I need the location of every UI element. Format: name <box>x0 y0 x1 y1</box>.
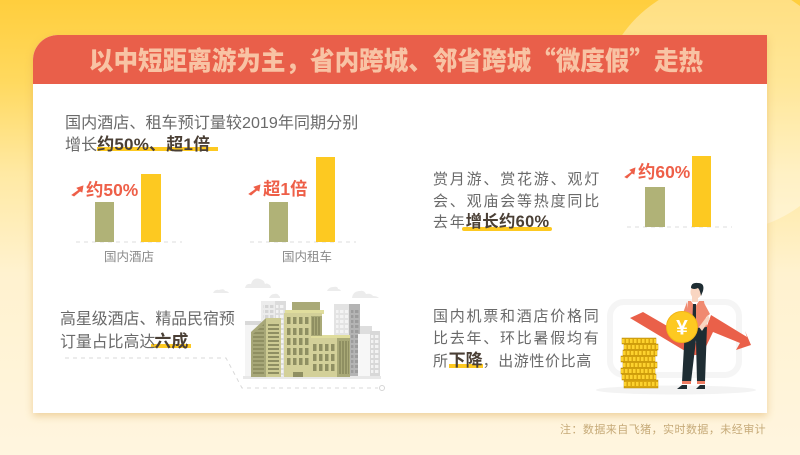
chart caption: hotels: 国内酒店 <box>104 250 154 264</box>
text block: prices: 比去年、环比暑假均有 <box>433 330 601 347</box>
bar chart: themed tours <box>624 156 732 228</box>
highlight: premium share <box>151 344 191 348</box>
text block: bookings: 国内酒店、租车预订量较2019年同期分别 <box>65 114 358 132</box>
chart label: themed tours growth: 约60% <box>638 162 690 182</box>
text block: bookings <box>65 114 358 154</box>
illustration: man with coin and falling arrow <box>596 282 756 394</box>
chart caption: car rental: 国内租车 <box>282 250 332 264</box>
text block: themed tours: 赏月游、赏花游、观灯 <box>433 171 601 188</box>
text block: themed tours: 会、观庙会等热度同比 <box>433 192 601 210</box>
bar chart: hotels <box>71 174 182 242</box>
text block: themed tours <box>433 171 601 231</box>
chart label: car rental growth: 超1倍 <box>263 179 307 199</box>
illustration: man with coin and falling arrow: ¥ <box>676 316 688 340</box>
title: 以中短距离游为主，省内跨城、邻省跨城“微度假”走热 <box>89 41 703 78</box>
bar chart: car rental <box>248 157 356 242</box>
text block: premium share: 订量占比高达六成 <box>60 332 188 350</box>
title banner <box>33 35 767 84</box>
text block: bookings: 增长约50%、超1倍 <box>65 135 210 154</box>
chart label: hotels growth: 约50% <box>86 180 138 200</box>
text block: premium share: 高星级酒店、精品民宿预 <box>60 311 235 328</box>
footnote: 注：数据来自飞猪，实时数据，未经审计 <box>560 424 766 436</box>
text block: prices <box>433 308 601 370</box>
text block: themed tours: 去年增长约60% <box>433 213 549 231</box>
text block: prices: 所下降，出游性价比高 <box>433 351 592 370</box>
panel: main card <box>33 35 767 413</box>
text block: premium share <box>60 310 235 350</box>
highlight: bookings <box>97 147 218 151</box>
highlight: themed tours <box>462 227 552 231</box>
illustration: city buildings <box>65 278 385 391</box>
text block: prices: 国内机票和酒店价格同 <box>433 308 601 325</box>
decorative sun circle <box>600 0 800 231</box>
highlight: prices <box>449 364 483 368</box>
